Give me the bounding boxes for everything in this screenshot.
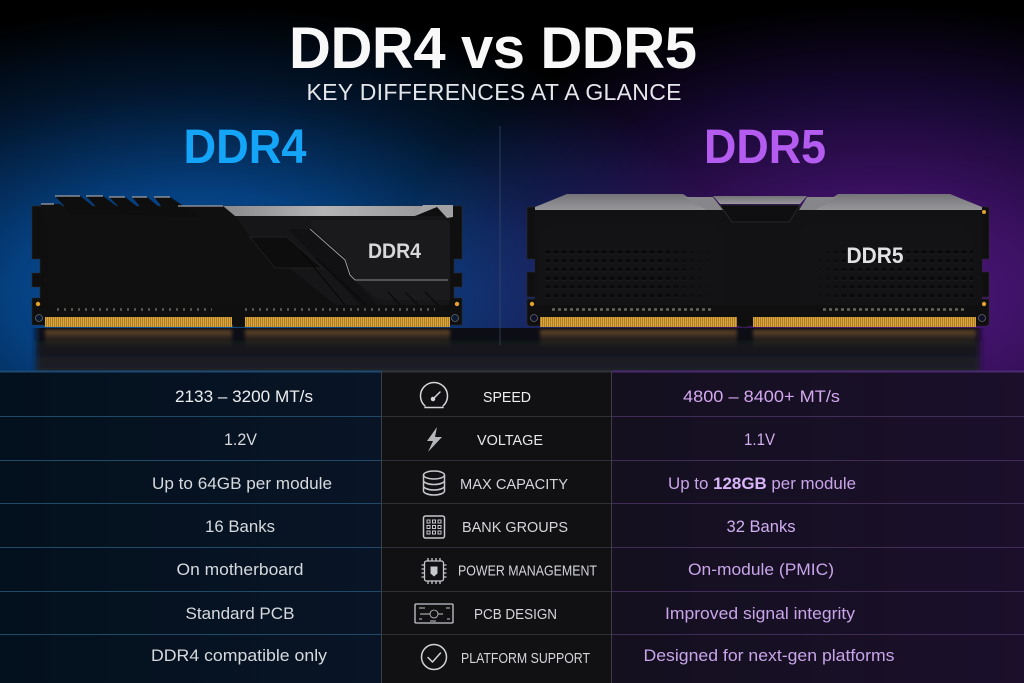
icon: check circle — [422, 644, 446, 670]
comparison table — [0, 372, 1024, 683]
row labels: PCB DESIGN — [474, 607, 557, 623]
chips line — [57, 308, 435, 311]
heading: DDR4: DDR4 — [184, 121, 307, 174]
title: DDR4 vs DDR5 — [289, 16, 697, 81]
DDR5 values: On-module (PMIC) — [688, 560, 834, 579]
DDR4 values: DDR4 compatible only — [151, 646, 328, 665]
icon: circuit board — [415, 604, 453, 623]
icon: database stack — [424, 471, 444, 495]
DDR4 values: 2133 – 3200 MT/s — [175, 387, 313, 406]
DDR4 values: 16 Banks — [205, 517, 275, 536]
DDR5 values: Designed for next-gen platforms — [644, 646, 894, 665]
reflection — [540, 330, 976, 348]
DDR5 values: Up to 128GB per module — [668, 474, 856, 493]
DDR4 values — [151, 387, 332, 665]
perforated panels — [539, 223, 722, 305]
silver bar — [223, 206, 423, 216]
module label: DDR5 — [846, 243, 904, 268]
heading: DDR5: DDR5 — [704, 121, 826, 174]
heatsink panels — [310, 220, 450, 300]
row labels — [458, 390, 597, 667]
heatsink fins — [55, 196, 200, 217]
silver top — [535, 194, 707, 210]
DDR5 values: 1.1V — [744, 430, 776, 449]
PCB — [527, 207, 989, 327]
chips line — [552, 308, 965, 311]
row labels: SPEED — [483, 390, 531, 406]
DDR4 values: Up to 64GB per module — [152, 474, 332, 493]
DDR4 values: 1.2V — [224, 430, 258, 449]
row labels: POWER MANAGEMENT — [458, 564, 597, 580]
icon: bank grid — [424, 516, 444, 538]
DDR4 values: On motherboard — [176, 560, 304, 579]
icon: speedometer — [421, 382, 447, 408]
DDR5 memory module — [527, 194, 989, 348]
DDR5 values: Improved signal integrity — [665, 604, 856, 623]
DDR5 values: 4800 – 8400+ MT/s — [683, 387, 840, 406]
DDR5 values: 32 Banks — [726, 517, 796, 536]
row labels: VOLTAGE — [477, 433, 543, 449]
DDR4 values: Standard PCB — [186, 604, 294, 623]
DDR5 values — [644, 387, 894, 665]
PCB — [32, 206, 462, 327]
subtitle: KEY DIFFERENCES AT A GLANCE — [306, 79, 682, 105]
row labels: BANK GROUPS — [462, 520, 568, 536]
gold contacts — [540, 317, 737, 327]
heatsink — [535, 210, 982, 305]
background — [0, 0, 1024, 380]
gold contacts — [45, 317, 232, 327]
row labels: MAX CAPACITY — [460, 477, 568, 493]
row labels: PLATFORM SUPPORT — [461, 651, 590, 667]
icon: chip — [422, 558, 446, 584]
reflection — [45, 330, 450, 348]
icon: lightning bolt — [427, 427, 442, 452]
heatsink — [41, 204, 450, 305]
DDR4 memory module — [32, 196, 462, 348]
module label: DDR4 — [368, 239, 421, 263]
